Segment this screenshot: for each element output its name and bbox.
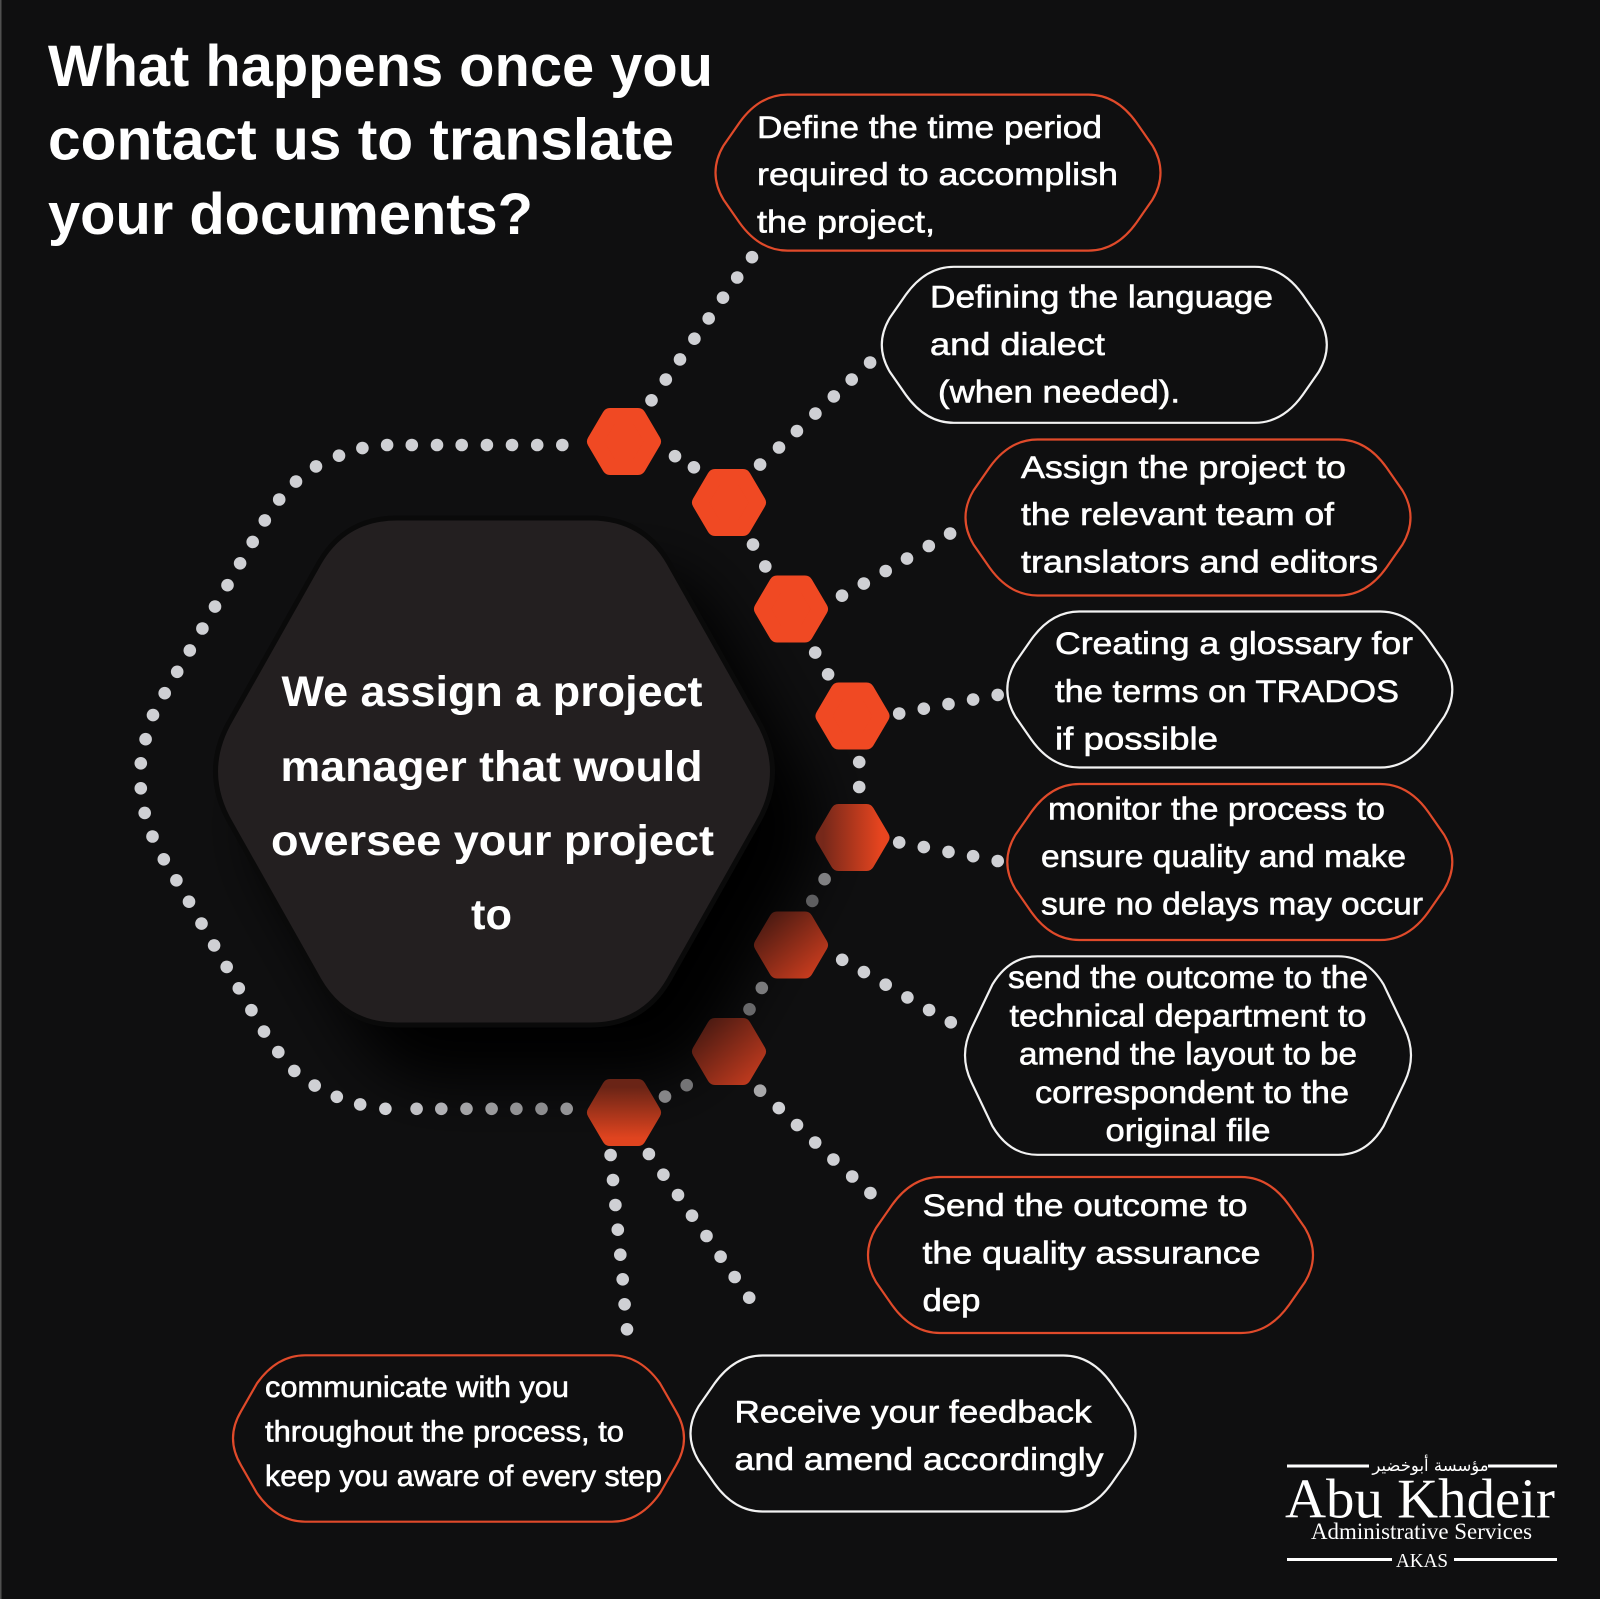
box: assign the project: translators and editors	[1021, 544, 1378, 580]
logo: AKAS	[1396, 1550, 1448, 1572]
box: communicate: communicate with you	[265, 1371, 569, 1404]
title	[48, 34, 713, 247]
logo: Abu Khdeir	[1285, 1468, 1555, 1530]
box: define time period: required to accomplish	[757, 156, 1118, 192]
box: technical department: correspondent to the	[1035, 1074, 1349, 1110]
center hexagon shadow	[260, 573, 818, 1080]
box: define time period: Define the time period	[757, 109, 1102, 145]
box: technical department: send the outcome to the	[1008, 959, 1368, 995]
box: monitor the process	[1007, 784, 1452, 940]
box: assign the project	[966, 440, 1410, 596]
box: glossary: the terms on TRADOS	[1055, 673, 1399, 709]
box: technical department: original file	[1106, 1112, 1270, 1148]
box: assign the project: the relevant team of	[1021, 496, 1334, 532]
box: monitor the process: monitor the process to	[1048, 790, 1385, 826]
logo	[1285, 1454, 1557, 1572]
step hexagons	[595, 416, 882, 1138]
box: quality assurance: Send the outcome to	[922, 1187, 1248, 1223]
box: quality assurance: the quality assurance	[922, 1234, 1260, 1270]
box: communicate: throughout the process, to	[265, 1416, 624, 1448]
box: communicate: keep you aware of every step	[265, 1460, 662, 1493]
box: quality assurance	[868, 1177, 1313, 1333]
box: receive feedback: Receive your feedback	[734, 1394, 1092, 1430]
box: communicate	[233, 1355, 684, 1522]
center hexagon with text: to	[471, 891, 512, 939]
title: contact us to translate	[48, 108, 674, 172]
box: quality assurance: dep	[922, 1282, 980, 1318]
box: glossary	[1007, 612, 1452, 768]
dotted connectors	[604, 251, 1004, 1336]
box: language and dialect: (when needed).	[938, 374, 1180, 410]
box: monitor the process: ensure quality and make	[1041, 838, 1406, 874]
box: glossary: if possible	[1055, 720, 1218, 756]
center hexagon with text	[216, 518, 772, 1025]
title: What happens once you	[48, 34, 713, 99]
box: assign the project: Assign the project to	[1021, 449, 1346, 485]
dotted loop around center	[134, 439, 573, 1115]
box: glossary: Creating a glossary for	[1055, 625, 1413, 661]
box: language and dialect: and dialect	[930, 326, 1105, 362]
logo: Administrative Services	[1311, 1519, 1532, 1544]
box: receive feedback: and amend accordingly	[734, 1441, 1104, 1477]
box: language and dialect: Defining the language	[930, 278, 1273, 314]
center hexagon with text: We assign a project	[282, 668, 702, 716]
box: technical department: amend the layout to be	[1019, 1036, 1357, 1072]
title: your documents?	[48, 182, 533, 247]
center hexagon with text: oversee your project	[271, 817, 714, 865]
box: receive feedback	[690, 1356, 1136, 1512]
box: language and dialect	[882, 267, 1327, 423]
box: define time period	[716, 95, 1160, 251]
box: technical department	[965, 956, 1411, 1155]
center hexagon with text: manager that would	[280, 743, 702, 791]
box: technical department: technical department to	[1010, 998, 1366, 1034]
logo: مؤسسة أبوخضير	[1371, 1454, 1489, 1476]
box: define time period: the project,	[757, 204, 935, 240]
box: monitor the process: sure no delays may occur	[1041, 886, 1423, 922]
